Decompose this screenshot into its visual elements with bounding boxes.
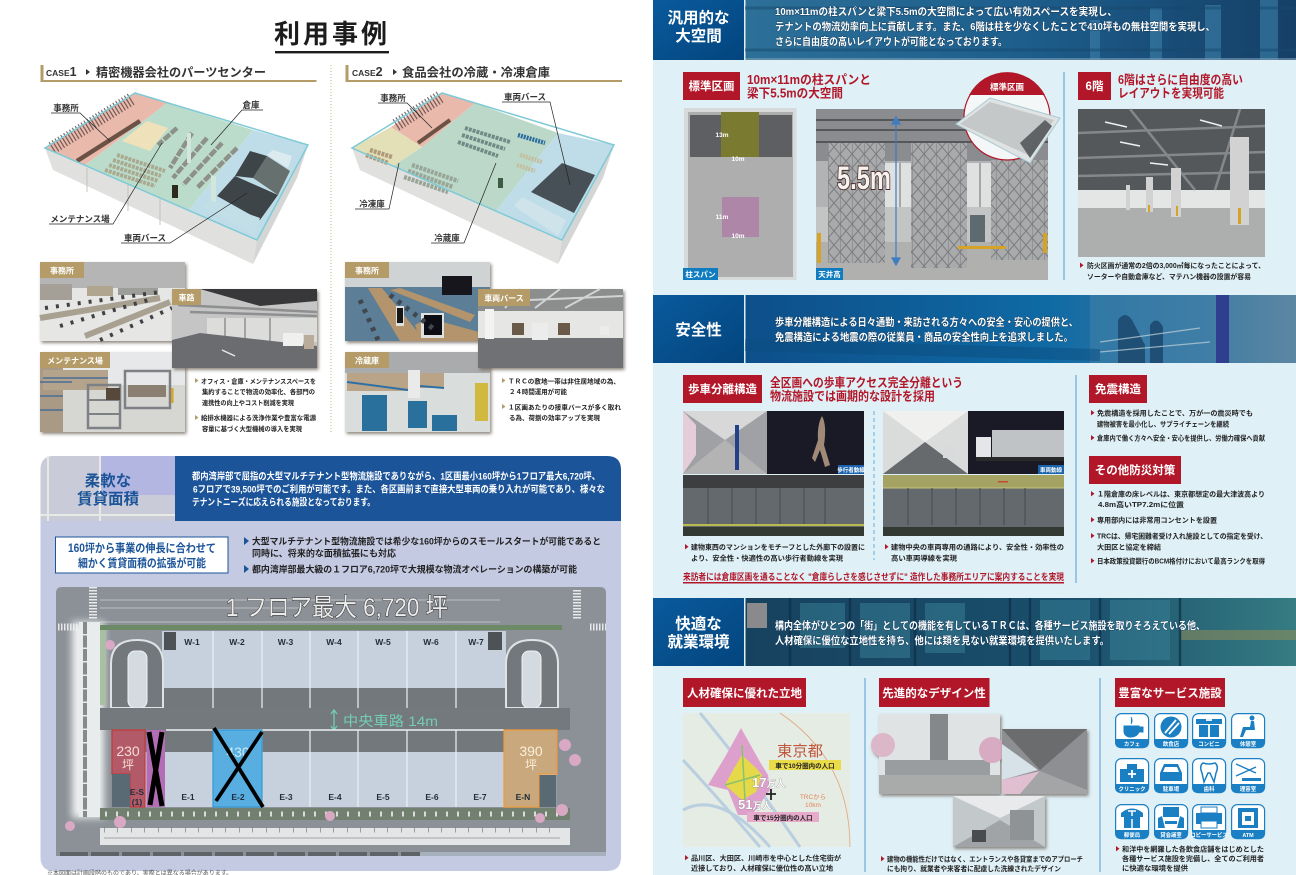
photo: lobby interior bbox=[953, 796, 1045, 847]
case 2 photo: 冷蔵庫: 冷蔵庫 bbox=[355, 356, 379, 366]
case 1 heading bbox=[40, 64, 316, 82]
text: その他防災対策 bullets: 大田区と協定を締結 bbox=[1097, 542, 1161, 552]
icon: 貸会議室: 貸会議室 bbox=[1160, 831, 1182, 839]
callout: 車両バース bbox=[502, 92, 570, 185]
floor map bbox=[56, 587, 606, 856]
callout box: 160坪から: 160坪から事業の伸長に合わせて bbox=[68, 541, 216, 555]
case 1 photo: 車路: 車路 bbox=[178, 292, 194, 302]
W row units: W-5 bbox=[375, 637, 391, 647]
section header: 汎用的な大空間: 汎用的な bbox=[667, 9, 730, 27]
icon: 休憩室 bbox=[1231, 714, 1265, 748]
section header: 安全性: 免震構造による地震の際の従業員・商品の安全性向上を追求しました。 bbox=[775, 330, 1073, 344]
plan diagram: 柱スパン: 13m bbox=[715, 132, 729, 139]
case 2 heading bbox=[346, 64, 622, 82]
photo: vehicle route bbox=[883, 411, 1064, 536]
icon: 郵便局: 郵便局 bbox=[1124, 831, 1140, 839]
red label: 標準区画 bbox=[683, 72, 740, 100]
heading: 10m×11m: 10m×11mの柱スパンと bbox=[747, 72, 871, 87]
page background: right side bbox=[653, 0, 1296, 875]
case 2 photo: 冷蔵庫 bbox=[345, 352, 490, 432]
case 2 text bullets: る為、荷捌の効率アップを実現 bbox=[509, 413, 600, 422]
central road label: 中央車路 14m bbox=[343, 713, 438, 729]
case 2 photo: 事務所 bbox=[345, 262, 490, 341]
callout box: 160坪から: 細かく賃貸面積の拡張が可能 bbox=[78, 556, 206, 570]
icon: コピーサービス: コピーサービス bbox=[1190, 831, 1228, 839]
case 2 heading: 食品会社の冷蔵・冷凍倉庫 bbox=[402, 64, 550, 80]
heading: 6階: 6階はさらに自由度の高い bbox=[1118, 72, 1243, 87]
bullet text bbox=[244, 536, 601, 574]
panel banner bbox=[40, 456, 621, 521]
callout: 冷蔵庫: 冷蔵庫 bbox=[434, 233, 460, 243]
case 2 photo: 車両バース bbox=[478, 289, 623, 368]
W row units: W-7 bbox=[468, 637, 484, 647]
case 2 heading: CASE2 bbox=[352, 65, 383, 79]
unit E-S2 crossed out bbox=[146, 730, 165, 807]
red label: 標準区画: 標準区画 bbox=[688, 79, 734, 93]
W row units: W-2 bbox=[229, 637, 245, 647]
icon: コンビニ: コンビニ bbox=[1198, 740, 1220, 748]
section header: 汎用的な大空間 bbox=[653, 0, 1296, 60]
unit E-S 230坪: (1) bbox=[132, 797, 142, 807]
caption: 防火区画: 防火区画が通常の2倍の3,000㎡毎になったことによって、 bbox=[1087, 261, 1265, 270]
ramps bbox=[111, 640, 558, 708]
red label: 先進的なデザイン性: 先進的なデザイン性 bbox=[882, 686, 986, 700]
section header: 快適な就業環境 bbox=[653, 598, 1296, 666]
title: 利用事例: 利用事例 bbox=[274, 19, 390, 49]
icon: ATM bbox=[1231, 805, 1265, 839]
case 1 text bullets: 連携性の向上やコスト削減を実現 bbox=[202, 398, 294, 407]
callout: 事務所 bbox=[378, 93, 432, 128]
callout: 倉庫: 倉庫 bbox=[242, 100, 260, 110]
caption: 和洋中: に快適な環境を提供 bbox=[1122, 864, 1188, 872]
icon: ATM: ATM bbox=[1242, 833, 1254, 839]
plan diagram: 柱スパン: 柱スパン bbox=[685, 269, 716, 279]
case 1 isometric floor plan bbox=[45, 93, 308, 264]
icon: 飲食店 bbox=[1154, 714, 1188, 748]
red label: 歩車分離構造 bbox=[683, 375, 762, 403]
text: 免震構造 bullets: 建物被害を最小化し、サプライチェーンを継続 bbox=[1097, 420, 1229, 428]
red label: その他防災対策 bbox=[1089, 456, 1181, 484]
W row units: W-6 bbox=[423, 637, 439, 647]
map: 東京都 population: 車で10分圏内の人口 bbox=[775, 761, 835, 770]
circle inset: 標準区画 bbox=[956, 72, 1060, 163]
callout: メンテナンス場: メンテナンス場 bbox=[50, 214, 110, 224]
heading: 10m×11m: 梁下5.5mの大空間 bbox=[747, 86, 843, 100]
case 2 isometric floor plan bbox=[352, 92, 614, 264]
section header: 快適な就業環境: 人材確保に優位な立地性を持ち、他には類を見ない就業環境を提供いたします。 bbox=[775, 634, 1109, 647]
rack photo with 5.5m height: 天井高 bbox=[818, 269, 841, 279]
captions: 歩車分離: 建物東西のマンションをモチーフとした外廊下の設置に bbox=[691, 542, 865, 552]
rack photo with 5.5m height: 5.5m bbox=[837, 160, 891, 196]
unit E-S 230坪: 230 bbox=[116, 743, 140, 759]
heading: 6階: レイアウトを実現可能 bbox=[1118, 86, 1224, 100]
bullet text: 同時に、将来的な面積拡張にも対応 bbox=[252, 548, 396, 558]
icon: 駐車場: 駐車場 bbox=[1163, 785, 1180, 793]
text: その他防災対策 bullets: TRCは、帰宅困難者受け入れ施設としての指定を受け、 bbox=[1097, 532, 1267, 540]
icon: 歯科: 歯科 bbox=[1204, 785, 1215, 793]
case 1 text bullets: 容量に基づく大型機械の導入を実現 bbox=[202, 424, 302, 433]
case 1 photo: メンテナンス場: メンテナンス場 bbox=[47, 356, 103, 366]
icon: クリニック: クリニック bbox=[1119, 785, 1145, 793]
heading: 全区画への bbox=[770, 375, 963, 404]
red label: 歩車分離構造: 歩車分離構造 bbox=[688, 382, 757, 396]
icon: 貸会議室 bbox=[1154, 805, 1188, 839]
icon: 郵便局 bbox=[1115, 805, 1149, 839]
text: 免震構造 bullets bbox=[1091, 408, 1265, 442]
E row units: E-5 bbox=[376, 792, 390, 802]
central road label bbox=[331, 710, 438, 730]
callout: 事務所: 事務所 bbox=[380, 93, 406, 103]
case 1 text bullets: 集約することで物流の効率化、各部門の bbox=[202, 387, 315, 396]
section header: 快適な就業環境: 快適な bbox=[675, 614, 722, 633]
cherry trees bbox=[65, 640, 581, 831]
panel banner: 都内湾岸部で屈指の大型マルチテナント型物流施設でありながら、1区画最小160坪から1フロア最大6,720坪、 bbox=[192, 470, 600, 482]
map: 東京都 population bbox=[683, 713, 850, 847]
map: 東京都 population: 東京都 bbox=[777, 743, 823, 760]
caption: 品川区: 近接しており、人材確保に優位性の高い立地 bbox=[691, 864, 833, 872]
icon: 歯科 bbox=[1192, 759, 1226, 793]
caption: 防火区画 bbox=[1080, 261, 1265, 281]
callout: 事務所: 事務所 bbox=[53, 103, 79, 113]
photo: pedestrian route: 歩行者動線 bbox=[837, 466, 865, 474]
W row units: W-1 bbox=[184, 637, 200, 647]
icon: カフェ bbox=[1115, 714, 1149, 748]
map title: 1 フロア最大 6,720 坪 bbox=[226, 594, 448, 622]
case 1 heading: CASE1 bbox=[46, 65, 77, 79]
text: その他防災対策 bullets: 専用部内には非常用コンセントを設置 bbox=[1097, 516, 1217, 524]
caption: 和洋中 bbox=[1116, 844, 1264, 872]
unit E-2 crossed out: E-2 bbox=[231, 792, 245, 802]
caption: 品川区 bbox=[685, 854, 841, 872]
bullet text: 大型マルチテナント型物流施設では希少な160坪からのスモールスタートが可能であると bbox=[252, 536, 601, 546]
case 1 text bullets bbox=[195, 376, 316, 433]
icon: 休憩室: 休憩室 bbox=[1240, 740, 1257, 748]
case 2 text bullets: ２４時間運用が可能 bbox=[509, 387, 567, 396]
section header: 快適な就業環境: 構内全体がひとつの「街」としての機能を有しているＴＲＣは、各種サービス施設を取りそろえている他、 bbox=[775, 619, 1205, 632]
unit E-S 230坪: E-S bbox=[130, 787, 144, 797]
map: 東京都 population: 17万人 bbox=[752, 775, 786, 790]
unit E-S 230坪: 坪 bbox=[122, 758, 134, 772]
red label: 免震構造 bbox=[1089, 375, 1147, 403]
case 2 photo: 事務所: 事務所 bbox=[355, 266, 379, 276]
heading: 全区画への: 物流施設では画期的な設計を採用 bbox=[770, 388, 935, 404]
case 2 text bullets: ＴＲＣの敷地一帯は非住居地域の為、 bbox=[508, 376, 620, 386]
case 1 photo: 事務所 bbox=[40, 262, 185, 341]
photo: corridor bbox=[1002, 729, 1087, 794]
case 1 text bullets: オフィス・倉庫・メンテナンススペースを bbox=[201, 376, 316, 386]
red label: 先進的なデザイン性 bbox=[879, 678, 990, 707]
icon: 駐車場 bbox=[1154, 759, 1188, 793]
icon: 飲食店: 飲食店 bbox=[1163, 740, 1180, 748]
caption: 建物の機能性: にも拘り、就業者や来客者に配慮した洗練されたデザイン bbox=[887, 864, 1061, 873]
section header: 汎用的な大空間: テナントの物流効率向上に貢献します。また、6階は柱を少なくしたことで410坪もの無柱空間を実現し、 bbox=[775, 20, 1215, 33]
circle inset: 標準区画: 標準区画 bbox=[990, 82, 1024, 92]
plan diagram: 柱スパン: 10m bbox=[731, 233, 745, 240]
red label: 人材確保に優れた立地 bbox=[683, 678, 806, 707]
case 2 photo: 車両バース: 車両バース bbox=[484, 293, 524, 303]
W row units: W-3 bbox=[278, 637, 293, 647]
E row units bbox=[112, 730, 557, 807]
map: 東京都 population: 51万人 bbox=[738, 797, 772, 812]
caption: 和洋中: 和洋中を網羅した各飲食店舗をはじめとした bbox=[1122, 844, 1264, 854]
callout: メンテナンス場 bbox=[49, 143, 162, 224]
case 1 photo: 車路 bbox=[172, 289, 317, 368]
unit E-S 230坪 bbox=[112, 730, 145, 807]
callout box: 160坪から bbox=[56, 537, 228, 573]
callout: 車両バース: 車両バース bbox=[504, 92, 546, 102]
case 1 heading: 精密機器会社のパーツセンター bbox=[96, 64, 266, 80]
icon: コンビニ bbox=[1192, 714, 1226, 748]
section header: 安全性: 歩車分離構造による日々通勤・来訪される方々への安全・安心の提供と、 bbox=[775, 316, 1078, 328]
caption: 品川区: 品川区、大田区、川崎市を中心とした住宅街が bbox=[691, 854, 841, 862]
red note: 来訪者: 来訪者には倉庫区画を通ることなく "倉庫らしさを感じさせずに" 造作した事務所エリアに案内することを実現 bbox=[683, 571, 1064, 582]
rack photo with 5.5m height bbox=[816, 109, 1048, 280]
unit E-2 crossed out: 430 bbox=[226, 744, 250, 760]
E row units: E-6 bbox=[425, 792, 439, 802]
section header: 安全性: 安全性 bbox=[675, 320, 722, 339]
captions: 歩車分離 bbox=[685, 542, 1064, 562]
red label: その他防災対策: その他防災対策 bbox=[1095, 463, 1176, 477]
height arrow bbox=[892, 117, 900, 265]
E row units: E-1 bbox=[181, 792, 195, 802]
unit E-N 390坪: E-N bbox=[516, 792, 530, 802]
panel banner: 柔軟な bbox=[85, 472, 131, 490]
text: その他防災対策 bullets: 日本政策投資銀行のBCM格付けにおいて最高ランクを取得 bbox=[1097, 556, 1265, 566]
photo: 6階 column-free space bbox=[1078, 109, 1265, 257]
text: その他防災対策 bullets bbox=[1091, 490, 1267, 566]
panel banner: 6フロアで39,500坪でのご利用が可能です。また、各区画前まで直接大型車両の乗り入れが可能であり、様々な bbox=[193, 484, 605, 496]
callout: 冷凍庫: 冷凍庫 bbox=[359, 199, 385, 209]
plan diagram: 柱スパン: 11m bbox=[716, 214, 729, 221]
callout: 車両バース bbox=[121, 193, 247, 243]
case 1 text bullets: 給排水機器による洗浄作業や豊富な電源 bbox=[201, 413, 316, 422]
heading: 全区画への: 全区画への歩車アクセス完全分離という bbox=[770, 375, 963, 390]
captions: 歩車分離: 建物中央の車両専用の通路により、安全性・効率性の bbox=[891, 542, 1064, 552]
red label: 豊富なサービス施設 bbox=[1115, 678, 1225, 707]
panel banner: テナントニーズに応えられる施設となっております。 bbox=[192, 496, 375, 508]
red label: 免震構造: 免震構造 bbox=[1095, 382, 1141, 396]
case 2 text bullets bbox=[502, 376, 621, 422]
W row units: W-4 bbox=[326, 637, 342, 647]
red label: 6階: 6階 bbox=[1086, 80, 1104, 93]
icon: カフェ: カフェ bbox=[1124, 741, 1140, 748]
section header: 快適な就業環境: 就業環境 bbox=[667, 633, 730, 651]
callout: 冷凍庫 bbox=[355, 163, 399, 209]
unit E-N 390坪: 坪 bbox=[525, 758, 537, 772]
photo: entrance exterior bbox=[871, 714, 1005, 794]
callout: 車両バース: 車両バース bbox=[124, 233, 166, 243]
map: 東京都 population: 10km bbox=[805, 802, 821, 809]
caption: 建物の機能性 bbox=[881, 854, 1083, 873]
section header: 汎用的な大空間: 大空間 bbox=[675, 26, 722, 45]
caption: 建物の機能性: 建物の機能性だけではなく、エントランスや各貸室までのアプローチ bbox=[887, 854, 1083, 864]
photo: vehicle route: 車両動線 bbox=[1040, 466, 1062, 474]
icon: 理容室 bbox=[1231, 759, 1265, 793]
red label: 豊富なサービス施設: 豊富なサービス施設 bbox=[1118, 686, 1222, 700]
captions: 歩車分離: 高い車両導線を実現 bbox=[891, 554, 957, 562]
E row units: E-7 bbox=[473, 792, 487, 802]
heading: 6階 bbox=[1118, 72, 1243, 100]
panel: 柔軟な賃貸面積 bbox=[40, 456, 621, 871]
unit E-N 390坪: 390 bbox=[519, 743, 543, 759]
caption: 防火区画: ソーターや自動倉庫など、マテハン機器の設置が容易 bbox=[1087, 272, 1251, 281]
plan diagram: 柱スパン bbox=[683, 108, 796, 280]
map: 東京都 population: TRCから bbox=[800, 793, 826, 801]
section header: 汎用的な大空間: さらに自由度の高いレイアウトが可能となっております。 bbox=[775, 35, 1007, 48]
icon: クリニック bbox=[1115, 759, 1149, 793]
E row units: E-3 bbox=[279, 792, 293, 802]
case 1 photo: メンテナンス場 bbox=[40, 352, 185, 432]
text: その他防災対策 bullets: 4.8m高いTP7.2mに位置 bbox=[1098, 500, 1184, 509]
callout: 事務所 bbox=[51, 103, 110, 141]
text: 免震構造 bullets: 免震構造を採用したことで、万が一の震災時でも bbox=[1097, 408, 1253, 418]
text: その他防災対策 bullets: １階倉庫の床レベルは、東京都想定の最大津波高より bbox=[1097, 490, 1265, 498]
callout: 冷蔵庫 bbox=[431, 163, 496, 243]
bullet text: 都内湾岸部最大級の１フロア6,720坪で大規模な物流オペレーションの構築が可能 bbox=[252, 564, 577, 574]
case 2 text bullets: １区画あたりの接車バースが多く取れ bbox=[508, 402, 621, 412]
photo: pedestrian route bbox=[683, 411, 865, 536]
red label: 人材確保に優れた立地: 人材確保に優れた立地 bbox=[687, 686, 802, 700]
icon: コピーサービス bbox=[1190, 805, 1228, 839]
section header: 安全性 bbox=[653, 295, 1296, 363]
unit E-2 crossed out bbox=[213, 728, 263, 807]
captions: 歩車分離: より、安全性・快適性の高い歩行者動線を実現 bbox=[691, 554, 843, 562]
red label: 6階 bbox=[1078, 72, 1111, 100]
plan diagram: 柱スパン: 10m bbox=[731, 156, 745, 163]
unit E-N 390坪 bbox=[504, 730, 557, 807]
caption: 和洋中: 各種サービス施設を完備し、全てのご利用者 bbox=[1122, 854, 1264, 863]
text: 免震構造 bullets: 倉庫内で働く方々へ安全・安心を提供し、労働力確保へ貢献 bbox=[1097, 434, 1265, 442]
panel banner: 賃貸面積 bbox=[77, 489, 139, 508]
section header: 汎用的な大空間: 10m×11mの柱スパンと梁下5.5mの大空間によって広い有効スペースを実現し、 bbox=[775, 5, 1117, 18]
callout: 倉庫 bbox=[211, 100, 263, 145]
map: 東京都 population: 車で15分圏内の人口 bbox=[753, 813, 813, 822]
E row units: E-4 bbox=[328, 792, 342, 802]
icon: 理容室: 理容室 bbox=[1240, 785, 1257, 793]
W row units bbox=[162, 631, 506, 708]
case 1 photo: 事務所: 事務所 bbox=[50, 266, 74, 276]
heading: 10m×11m bbox=[747, 72, 871, 100]
